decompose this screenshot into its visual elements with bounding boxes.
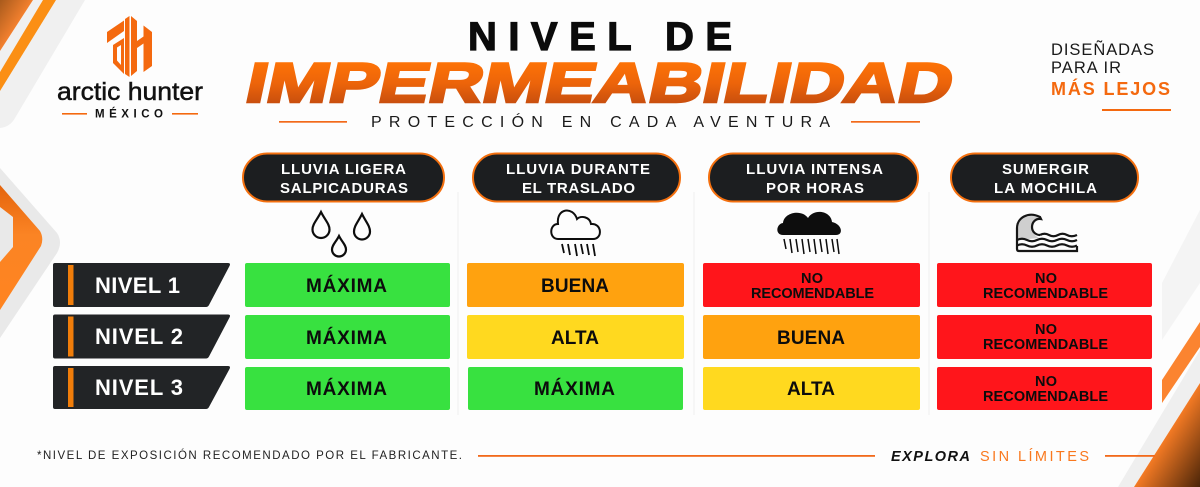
column header: sumergir (951, 154, 1138, 202)
logo (57, 16, 203, 120)
matrix: column 1: MÁXIMA (306, 378, 387, 400)
row label: nivel 1: NIVEL 1 (95, 273, 180, 298)
subtitle: PROTECCIÓN EN CADA AVENTURA (371, 112, 830, 131)
footnote: *NIVEL DE EXPOSICIÓN RECOMENDADO POR EL FABRICANTE. (37, 449, 462, 462)
icon: water drops (312, 212, 370, 257)
column header: lluvia intensa (709, 154, 918, 202)
footer rule (478, 455, 875, 457)
matrix: column 3 (703, 263, 920, 410)
logo mark (107, 16, 152, 77)
column header: sumergir: LA MOCHILA (994, 180, 1097, 197)
decoration: bottom-right corner (1118, 210, 1200, 487)
row label: nivel 3 (53, 366, 230, 409)
row label: nivel 2 (53, 314, 230, 358)
matrix: column 1: MÁXIMA (306, 327, 387, 349)
title (240, 15, 960, 131)
matrix: column 3: ALTA (787, 379, 835, 400)
icon: heavy rain cloud (777, 212, 841, 254)
footer slogan: EXPLORA (891, 449, 970, 465)
row label: nivel 3: NIVEL 3 (95, 375, 183, 400)
column header: lluvia durante: LLUVIA DURANTE (506, 161, 650, 178)
column header: lluvia ligera (243, 154, 444, 202)
logo wordmark: arctic hunter (57, 78, 203, 106)
footer slogan: SIN LÍMITES (980, 448, 1089, 465)
matrix: column 4 (937, 263, 1152, 410)
matrix: column 3: BUENA (777, 328, 845, 349)
tagline: DISEÑADAS (1051, 39, 1154, 59)
column header: lluvia intensa: POR HORAS (766, 180, 864, 197)
matrix: column 4: NO (1035, 374, 1057, 390)
title line 1: NIVEL DE (468, 15, 732, 59)
column header: sumergir: SUMERGIR (1002, 161, 1089, 178)
footer slogan (891, 448, 1155, 465)
title line 2: IMPERMEABILIDAD (240, 52, 960, 114)
column header: lluvia durante: EL TRASLADO (522, 180, 635, 197)
logo subtitle: MÉXICO (95, 108, 163, 120)
tagline: PARA IR (1051, 59, 1121, 77)
decoration: left chevron (0, 168, 60, 338)
matrix: column 2: MÁXIMA (534, 378, 615, 400)
matrix: column 2: ALTA (551, 328, 599, 349)
matrix: column 3: RECOMENDABLE (751, 286, 874, 302)
icon: wave (1017, 215, 1077, 251)
matrix: column 4: RECOMENDABLE (983, 337, 1108, 353)
row label: nivel 2: NIVEL 2 (95, 324, 183, 349)
column header: lluvia ligera: LLUVIA LIGERA (281, 161, 406, 178)
matrix: column 4: RECOMENDABLE (983, 389, 1108, 405)
matrix: column 1: MÁXIMA (306, 275, 387, 297)
matrix: column 3: NO (801, 271, 823, 287)
matrix: column 1 (245, 263, 450, 410)
decoration: top-left corner (0, 0, 85, 128)
tagline (1051, 39, 1171, 111)
matrix: column 2 (467, 263, 684, 410)
row label: nivel 1 (53, 263, 230, 307)
column header: lluvia ligera: SALPICADURAS (280, 180, 408, 197)
matrix: column 4: NO (1035, 271, 1057, 287)
tagline: MÁS LEJOS (1051, 78, 1170, 99)
matrix: column 4: NO (1035, 322, 1057, 338)
column header: lluvia durante (473, 154, 680, 202)
icon: rain cloud (551, 210, 600, 256)
matrix: column 4: RECOMENDABLE (983, 286, 1108, 302)
column header: lluvia intensa: LLUVIA INTENSA (746, 161, 883, 178)
column separators (458, 192, 929, 415)
matrix: column 2: BUENA (541, 276, 609, 297)
